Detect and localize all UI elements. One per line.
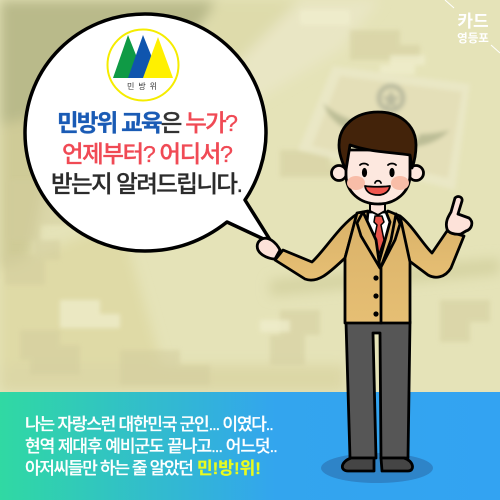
- ears: [332, 166, 346, 180]
- bubble heading text: [51, 110, 242, 197]
- cheeks: [347, 176, 409, 190]
- left hand: [257, 238, 280, 259]
- face: [346, 150, 410, 204]
- bottom band: [0, 392, 500, 500]
- bottom caption: [25, 415, 277, 478]
- right hand: [446, 197, 472, 234]
- eyes and brows: [360, 164, 396, 183]
- bottom caption: 나는 자랑스런 대한민국 군인... 이였다..: [25, 415, 273, 434]
- card logo: 카드: [457, 12, 489, 31]
- jacket body: [345, 211, 410, 323]
- lapels: [357, 212, 380, 268]
- neck: [370, 204, 385, 215]
- character shadow: [321, 453, 433, 483]
- left arm: [275, 214, 357, 280]
- bottom caption: 현역 제대후 예비군도 끝나고... 어느덧..: [25, 437, 277, 456]
- bottom caption: 민!방!위!: [197, 459, 260, 478]
- card logo: 영등포: [457, 32, 489, 45]
- shirt and tie: [367, 212, 390, 262]
- card logo: [445, 0, 500, 53]
- bubble heading text: 민방위 교육은 누가?: [57, 110, 238, 136]
- icon: civil defense logo: 민방위: [127, 81, 161, 91]
- character: man in jacket: [257, 112, 472, 471]
- trousers: [346, 322, 410, 458]
- bubble heading text: 언제부터? 어디서?: [62, 141, 233, 167]
- hair: [339, 112, 416, 170]
- mouth: [365, 186, 390, 195]
- buttons: [373, 275, 379, 317]
- background: camouflage uniform photo: [0, 0, 500, 395]
- speech bubble: [25, 14, 272, 251]
- bottom caption: 아저씨들만 하는 줄 알았던: [25, 459, 193, 478]
- icon: civil defense logo: [108, 30, 178, 100]
- shoes: [342, 458, 413, 471]
- background: uniform name patch with emblem: [298, 66, 470, 190]
- right arm: [400, 216, 464, 277]
- bubble heading text: 받는지 알려드립니다.: [51, 171, 242, 197]
